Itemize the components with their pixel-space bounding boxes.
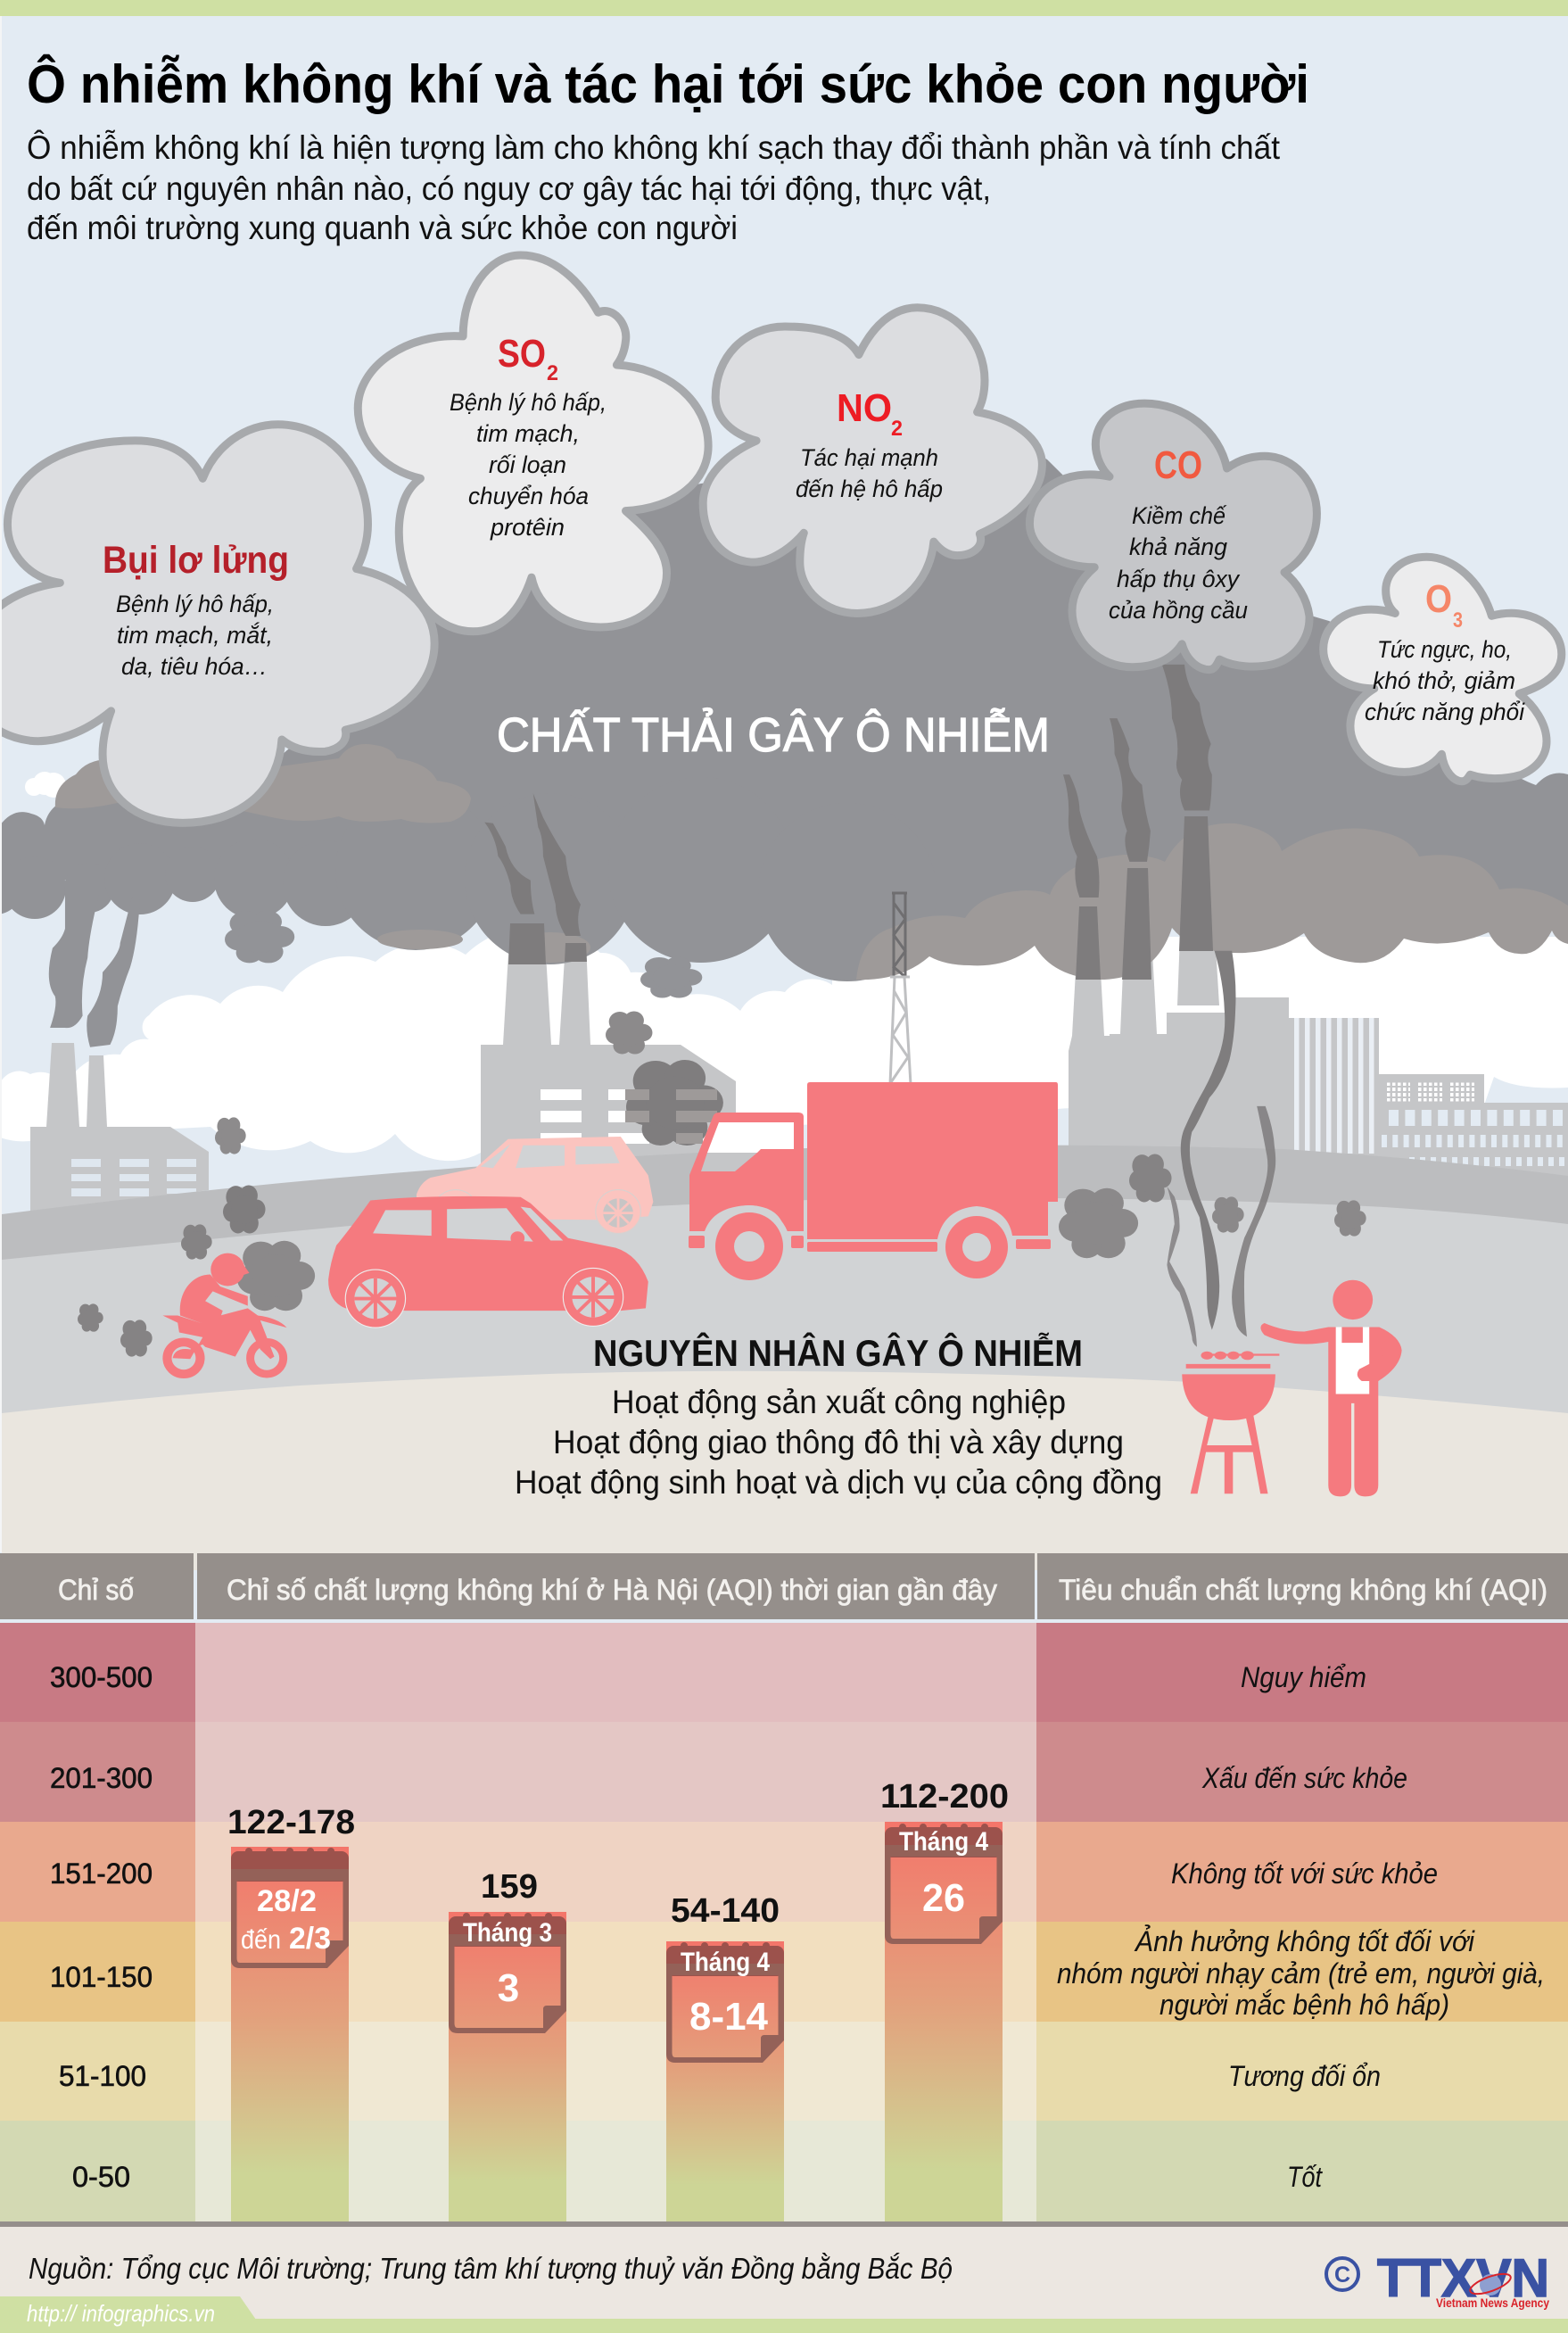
griller person <box>1260 1280 1402 1496</box>
index labels: 101-150 <box>50 1961 153 1993</box>
index labels: 201-300 <box>50 1762 153 1794</box>
bar: tháng 3 <box>449 1868 566 2221</box>
causes text block <box>515 1331 1162 1501</box>
sky background <box>0 0 1568 1570</box>
table header: Chỉ số chất lượng không khí ở Hà Nội (AQI) thời gian gần đây <box>227 1574 997 1606</box>
cloud: SO2: Bệnh lý hô hấp, <box>450 389 607 416</box>
cloud: SO2: rối loạn <box>489 451 566 478</box>
standard labels: Nguy hiểm <box>1241 1661 1366 1693</box>
striped tower block <box>1294 1018 1379 1154</box>
bar: tháng 4 first <box>666 1892 784 2221</box>
bar: tháng 4 first: Tháng 4 <box>681 1948 770 1977</box>
windows seen through smoke <box>625 1089 717 1144</box>
cloud: O3: Tức ngực, ho, <box>1377 636 1512 663</box>
bar: 28/2 đến 2/3: đến <box>241 1925 281 1955</box>
smoke blobs along the road <box>78 1011 1366 1357</box>
source note: Nguồn: Tổng cục Môi trường; Trung tâm khí tượng thuỷ văn Đồng bằng Bắc Bộ <box>29 2252 953 2285</box>
plumes from right stacks <box>1063 665 1212 898</box>
right city blocks <box>1382 1087 1568 1162</box>
cloud: SO2: tim mạch, <box>476 420 580 447</box>
cloud: bụi lơ lửng: da, tiêu hóa… <box>121 653 268 680</box>
road: back hill <box>2 1145 1568 1338</box>
bar: 28/2 đến 2/3: 28/2 <box>257 1884 317 1918</box>
causes text block: Hoạt động sinh hoạt và dịch vụ của cộng đồng <box>515 1464 1162 1501</box>
intro text: Ô nhiễm không khí là hiện tượng làm cho không khí sạch thay đổi thành phần và tính chất <box>27 129 1281 166</box>
standard labels: Tương đối ổn <box>1228 2060 1381 2092</box>
causes text block: Hoạt động giao thông đô thị và xây dựng <box>553 1424 1124 1460</box>
AQI bands <box>0 1623 1568 2221</box>
causes text block: Hoạt động sản xuất công nghiệp <box>612 1384 1066 1420</box>
table header: Chỉ số <box>58 1574 134 1606</box>
causes text block: NGUYÊN NHÂN GÂY Ô NHIỄM <box>593 1331 1083 1374</box>
cloud: SO2: SO <box>498 332 546 376</box>
brown haze left <box>55 744 471 823</box>
copyright icon: C <box>1334 2263 1350 2287</box>
cloud: NO2 <box>703 308 1042 613</box>
cloud: CO: CO <box>1154 443 1202 487</box>
white background clouds <box>0 772 1568 1161</box>
bar: tháng 3: 3 <box>498 1966 519 2010</box>
standard labels: người mắc bệnh hô hấp) <box>1159 1989 1449 2021</box>
TTXVN logo: Vietnam News Agency <box>1436 2296 1549 2310</box>
right factory and stacks <box>1069 816 1568 1187</box>
cloud: O3: O <box>1425 577 1452 621</box>
bar: 28/2 đến 2/3 <box>227 1804 355 2221</box>
bar: tháng 4 second: 112-200 <box>880 1778 1009 1816</box>
brown haze right <box>377 823 1568 980</box>
table header: Tiêu chuẩn chất lượng không khí (AQI) <box>1059 1574 1547 1606</box>
intro text <box>27 129 1281 246</box>
AQI table <box>0 1553 1568 2221</box>
standard labels <box>1057 1661 1545 2193</box>
cloud: NO2: NO <box>837 386 892 430</box>
cloud: O3: 3 <box>1453 608 1463 633</box>
label: chất thải gây ô nhiễm: CHẤT THẢI GÂY Ô NHIỄM <box>497 707 1050 762</box>
intro text: đến môi trường xung quanh và sức khỏe con người <box>27 210 738 246</box>
index labels: 51-100 <box>59 2060 146 2092</box>
cloud: O3: khó thở, giảm <box>1373 667 1515 694</box>
bar: tháng 3: 159 <box>481 1868 538 1906</box>
smoke mass: chất thải <box>0 446 1568 1047</box>
motorbike rider <box>162 1253 287 1374</box>
cloud: O3: chức năng phổi <box>1365 699 1525 725</box>
standard labels: Xấu đến sức khỏe <box>1201 1762 1407 1794</box>
light pink car <box>417 1137 653 1233</box>
bar: tháng 4 first: 54-140 <box>671 1892 780 1930</box>
footer band <box>0 2221 1568 2333</box>
intro text: do bất cứ nguyên nhân nào, có nguy cơ gây tác hại tới động, thực vật, <box>27 170 991 207</box>
cloud: CO <box>1029 403 1316 670</box>
bar: 28/2 đến 2/3: 2/3 <box>289 1922 331 1956</box>
cloud: CO: hấp thụ ôxy <box>1117 566 1240 592</box>
TTXVN logo: TTXVN <box>1377 2248 1549 2308</box>
standard labels: nhóm người nhạy cảm (trẻ em, người già, <box>1057 1957 1545 1990</box>
index labels: 0-50 <box>72 2161 130 2193</box>
index labels: 300-500 <box>50 1661 153 1693</box>
road: front <box>2 1197 1568 1445</box>
cloud: bụi lơ lửng: Bụi lơ lửng <box>103 539 289 582</box>
red car <box>328 1196 648 1328</box>
cloud: bụi lơ lửng: Bệnh lý hô hấp, <box>116 591 274 617</box>
cloud: SO2: 2 <box>547 361 558 385</box>
bar: 28/2 đến 2/3: 122-178 <box>227 1804 355 1841</box>
top green band <box>0 0 1568 16</box>
standard labels: Không tốt với sức khỏe <box>1171 1857 1438 1890</box>
cloud: CO: khả năng <box>1129 534 1227 560</box>
standard labels: Tốt <box>1287 2161 1323 2193</box>
far left factory <box>30 1043 209 1212</box>
cloud: NO2: Tác hại mạnh <box>800 444 938 471</box>
bar: tháng 4 second <box>880 1778 1009 2221</box>
barbecue grill <box>1182 1351 1279 1493</box>
index labels <box>50 1661 153 2193</box>
cloud: O3 <box>1324 557 1562 782</box>
cloud: CO: của hồng cầu <box>1109 597 1248 624</box>
cloud: NO2: đến hệ hô hấp <box>796 476 943 502</box>
title: Ô nhiễm không khí và tác hại tới sức khỏe con người <box>27 54 1309 114</box>
cloud: CO: Kiềm chế <box>1132 502 1227 529</box>
copyright icon <box>1326 2258 1358 2290</box>
cloud: bụi lơ lửng: tim mạch, mắt, <box>117 621 273 649</box>
cloud: SO2: protêin <box>490 514 565 541</box>
truck <box>689 1082 1058 1287</box>
standard labels: Ảnh hưởng không tốt đối với <box>1134 1925 1475 1957</box>
foreground ground <box>2 1371 1568 1570</box>
plumes from central stacks <box>484 793 581 936</box>
table header <box>0 1553 1568 1619</box>
cloud: bụi lơ lửng <box>0 425 434 823</box>
cloud: SO2: chuyển hóa <box>468 483 589 509</box>
cloud: SO2 <box>358 255 708 632</box>
bar: tháng 3: Tháng 3 <box>463 1918 552 1948</box>
bar: tháng 4 second: 26 <box>922 1876 965 1920</box>
index labels: 151-200 <box>50 1857 153 1890</box>
central factory <box>481 923 736 1169</box>
transmission tower <box>890 892 911 1084</box>
chimney tops over smoke <box>508 816 1213 980</box>
cloud: NO2: 2 <box>891 417 903 441</box>
bar: tháng 4 second: Tháng 4 <box>899 1827 988 1857</box>
bar: tháng 4 first: 8-14 <box>689 1995 769 2039</box>
barbecue smoke <box>1167 951 1275 1347</box>
website link: http:// infographics.vn <box>27 2300 215 2327</box>
left page edge <box>0 16 2 1552</box>
